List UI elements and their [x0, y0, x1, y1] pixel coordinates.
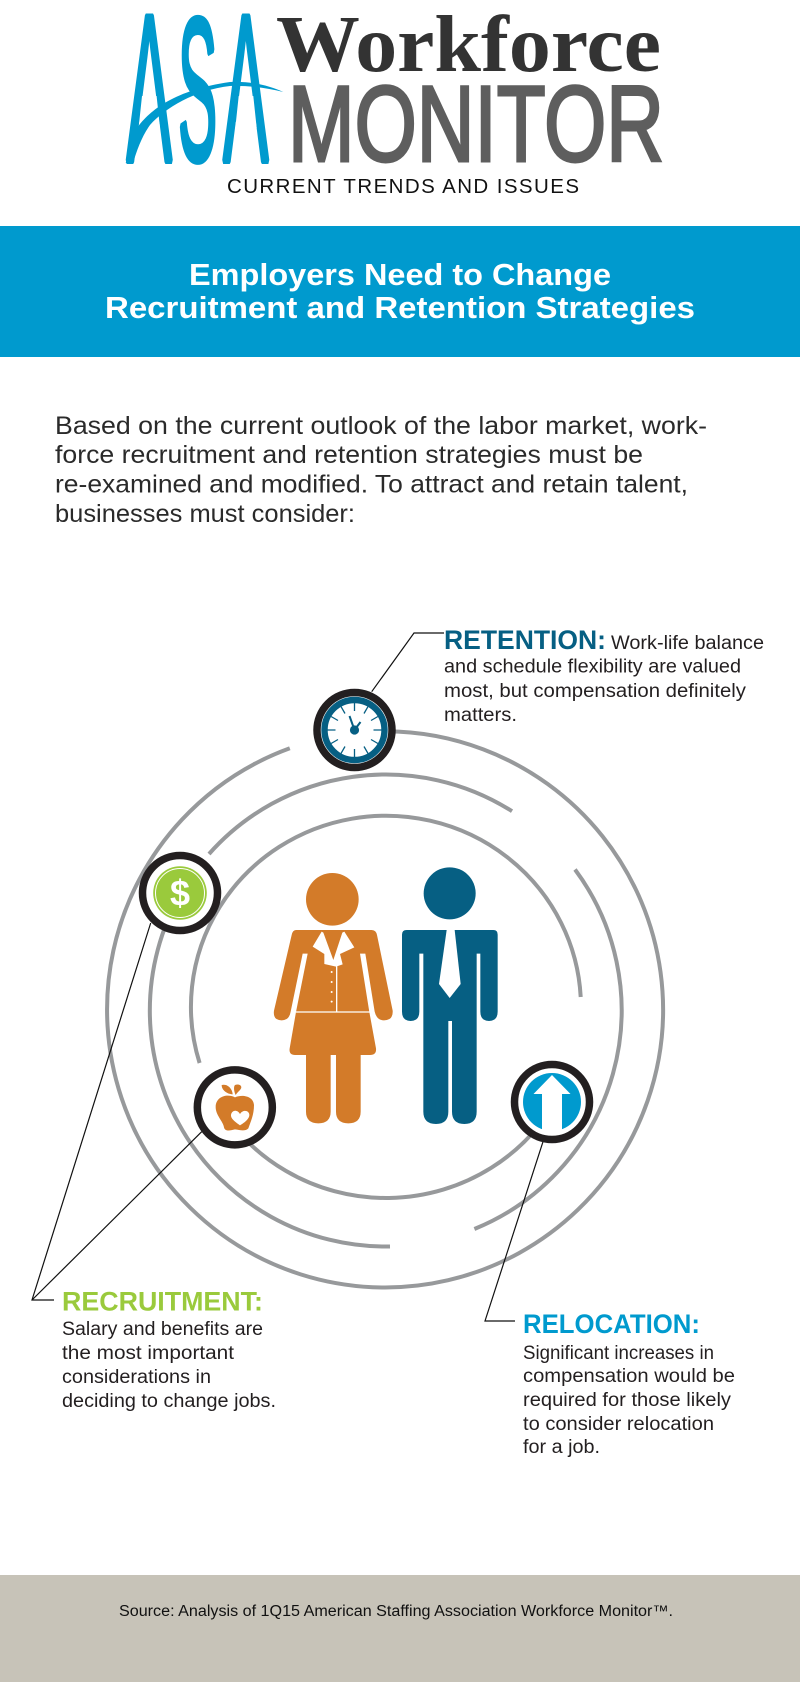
callout: recruitment: deciding to change jobs. [62, 1391, 276, 1412]
callout: recruitment: considerations in [62, 1367, 211, 1388]
logo: ASA mark [126, 0, 283, 207]
callout: retention: RETENTION: [444, 625, 606, 655]
callout: relocation: required for those likely [523, 1390, 732, 1411]
source note: Source: Analysis of 1Q15 American Staffing Association Workforce Monitor™. [119, 1603, 673, 1620]
callout: relocation [523, 1309, 735, 1458]
callout: retention [444, 625, 764, 726]
title: Recruitment and Retention Strategies [105, 290, 695, 325]
icon: man figure [402, 867, 498, 1124]
logo [126, 0, 664, 207]
intro text: re-examined and modified. To attract and retain talent, [55, 470, 688, 498]
intro text: Based on the current outlook of the labor market, work- [55, 412, 707, 440]
callout: relocation: RELOCATION: [523, 1309, 700, 1339]
icon: apple [197, 1070, 272, 1145]
callout: relocation: Significant increases in [523, 1343, 714, 1364]
callout: recruitment [62, 1286, 276, 1412]
callout: relocation: for a job. [523, 1437, 600, 1458]
icon: clock [317, 692, 392, 768]
callout: recruitment: RECRUITMENT: [62, 1286, 263, 1316]
intro text: businesses must consider: [55, 500, 355, 528]
callout: retention: and schedule flexibility are valued [444, 656, 741, 678]
logo: tagline: CURRENT TRENDS AND ISSUES [227, 175, 579, 198]
footer [0, 1575, 800, 1682]
icon: woman figure [274, 873, 393, 1123]
intro text: force recruitment and retention strategies must be [55, 441, 643, 469]
callout: relocation: to consider relocation [523, 1414, 714, 1435]
callout: recruitment: Salary and benefits are [62, 1319, 263, 1340]
logo: Monitor: MONITOR [288, 63, 664, 184]
title [105, 257, 695, 325]
icon: arrow [514, 1064, 590, 1140]
callout: retention: most, but compensation definitely [444, 681, 747, 702]
callout: recruitment: the most important [62, 1343, 235, 1364]
callout: relocation: compensation would be [523, 1366, 735, 1387]
leader lines [32, 633, 543, 1321]
title: Employers Need to Change [189, 257, 611, 292]
icon: dollar: $ [170, 872, 190, 914]
callout: retention: Work-life balance [611, 633, 764, 654]
intro text [55, 412, 707, 528]
concentric ring diagram [107, 731, 663, 1287]
icon: dollar [142, 856, 218, 930]
title banner [0, 226, 800, 357]
logo: Workforce: Workforce [276, 1, 661, 89]
callout: retention: matters. [444, 705, 517, 726]
